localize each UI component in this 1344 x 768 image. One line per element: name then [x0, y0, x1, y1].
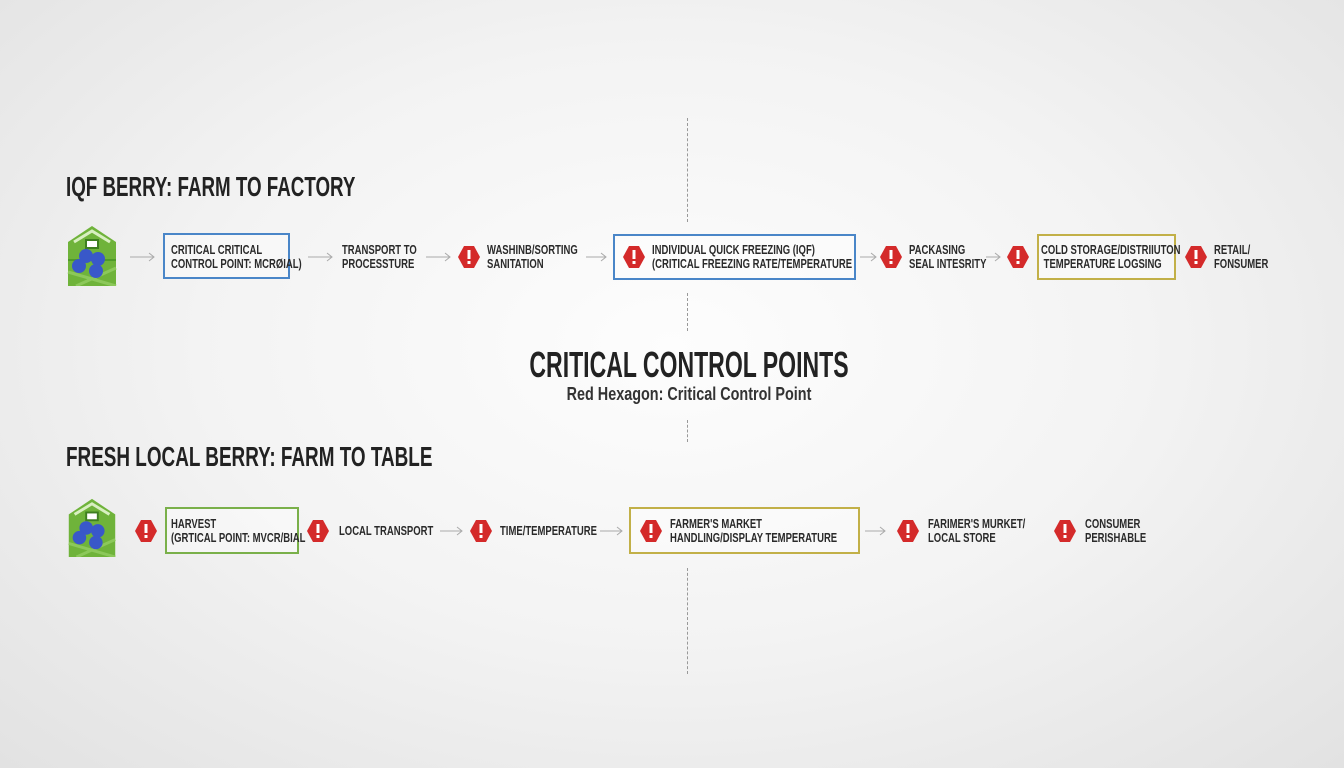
row: IQF flow: INDIVIDUAL QUICK FREEZING (IQF)	[652, 243, 815, 257]
row: IQF flow: CRITICAL CRITICAL	[171, 243, 262, 257]
text: transport: PROCESSTURE	[342, 257, 414, 271]
row: IQF flow: SEAL INTESRITY	[909, 257, 986, 271]
arrow	[426, 252, 451, 262]
row: IQF flow: COLD STORAGE/DISTRIIUTON	[1041, 243, 1181, 257]
text: transport	[342, 243, 417, 271]
row: IQF flow: (CRITICAL FREEZING RATE/TEMPERATURE	[652, 257, 852, 271]
row: fresh flow: LOCAL TRANSPORT	[339, 524, 433, 538]
box: harvest	[165, 507, 299, 554]
row: fresh flow	[68, 498, 1146, 557]
text: transport: TRANSPORT TO	[342, 243, 417, 257]
text: washing: SANITATION	[487, 257, 544, 271]
row: IQF flow: TEMPERATURE LOGSING	[1044, 257, 1162, 271]
heading: critical control points: Red Hexagon: Critical Control Point	[567, 384, 811, 404]
box: critical control point microbial	[163, 233, 290, 279]
row: fresh flow: FARMER'S MARKET	[670, 517, 762, 531]
box: IQF	[613, 234, 856, 280]
row: fresh flow: HANDLING/DISPLAY TEMPERATURE	[670, 531, 837, 545]
heading: critical control points: CRITICAL CONTROL POINTS	[529, 344, 849, 385]
row: IQF flow	[68, 226, 1268, 286]
row: fresh flow: (GRTICAL POINT: MVCR/BIAL	[171, 531, 305, 545]
row: fresh flow: PERISHABLE	[1085, 531, 1146, 545]
row: fresh flow: CONSUMER	[1085, 517, 1140, 531]
text: washing	[487, 243, 578, 271]
heading: critical control points	[529, 344, 849, 404]
arrow	[586, 252, 607, 262]
row: IQF flow: CONTROL POINT: MCRØIAL)	[171, 257, 302, 271]
row: IQF flow: FONSUMER	[1214, 257, 1268, 271]
icon: red hexagon	[458, 246, 480, 268]
row: fresh flow: TIME/TEMPERATURE	[500, 524, 597, 538]
row: fresh flow: FARIMER'S MURKET/	[928, 517, 1025, 531]
row: fresh flow: HARVEST	[171, 517, 216, 531]
row: fresh flow: LOCAL STORE	[928, 531, 996, 545]
row: IQF flow: PACKASING	[909, 243, 965, 257]
icon: red hexagon packaging	[880, 246, 902, 268]
arrow	[130, 252, 155, 262]
row: IQF flow: RETAIL/	[1214, 243, 1250, 257]
title: IQF berry: IQF BERRY: FARM TO FACTORY	[66, 171, 355, 202]
box: farmer's market	[629, 507, 860, 554]
box: cold storage	[1037, 234, 1176, 280]
text: washing: WASHINB/SORTING	[487, 243, 578, 257]
icon: farm barn	[68, 226, 116, 286]
arrow	[308, 252, 333, 262]
title: fresh local: FRESH LOCAL BERRY: FARM TO TABLE	[66, 441, 432, 472]
